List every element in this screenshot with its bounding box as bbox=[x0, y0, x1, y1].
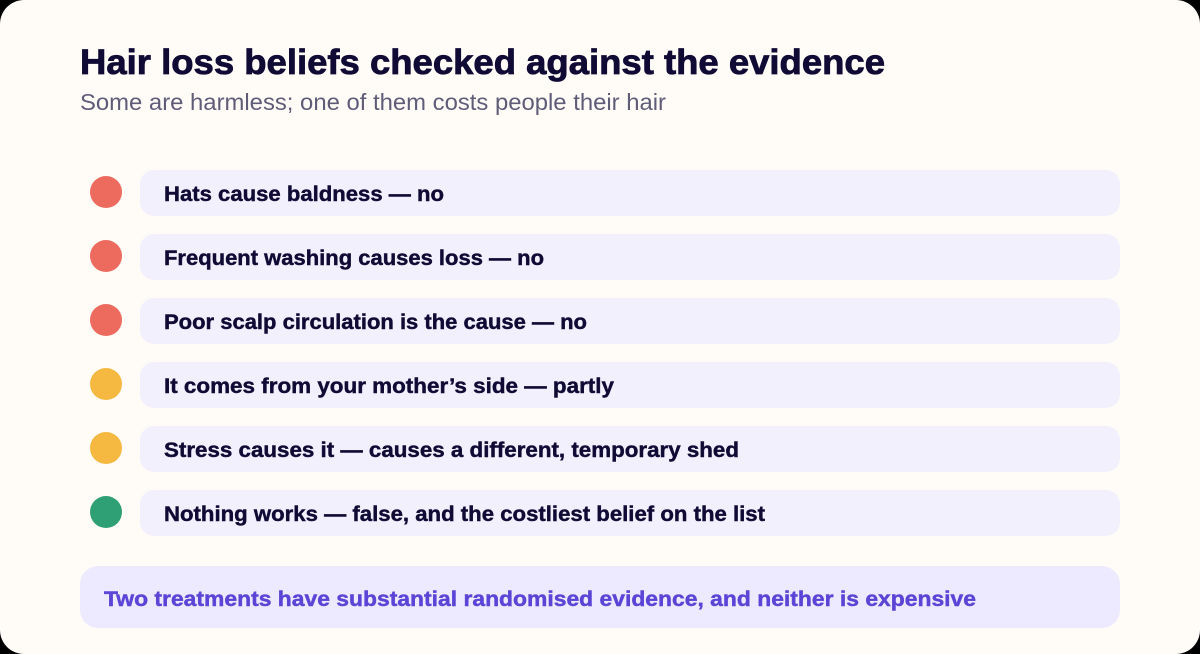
belief row: stress: Stress causes it — causes a different, temporary shed bbox=[164, 438, 739, 462]
belief row: stress bbox=[90, 426, 1120, 472]
belief row: washing bbox=[90, 234, 1120, 280]
belief row: circulation: Poor scalp circulation is the cause — no bbox=[164, 310, 587, 334]
subtitle: Some are harmless; one of them costs people their hair bbox=[80, 89, 666, 115]
belief row: mother's side: It comes from your mother’s side — partly bbox=[164, 374, 614, 398]
title: Hair loss beliefs checked against the evidence bbox=[80, 42, 885, 82]
belief row: mother's side bbox=[90, 362, 1120, 408]
callout: Two treatments have substantial randomised evidence, and neither is expensive bbox=[104, 587, 976, 611]
belief row: nothing works: Nothing works — false, and the costliest belief on the list bbox=[164, 502, 765, 526]
belief row: hats: Hats cause baldness — no bbox=[164, 182, 444, 206]
belief row: washing: Frequent washing causes loss — no bbox=[164, 246, 544, 270]
belief row: nothing works bbox=[90, 490, 1120, 536]
belief row: circulation bbox=[90, 298, 1120, 344]
callout bbox=[80, 566, 1120, 628]
belief list bbox=[90, 170, 1120, 536]
belief row: hats bbox=[90, 170, 1120, 216]
